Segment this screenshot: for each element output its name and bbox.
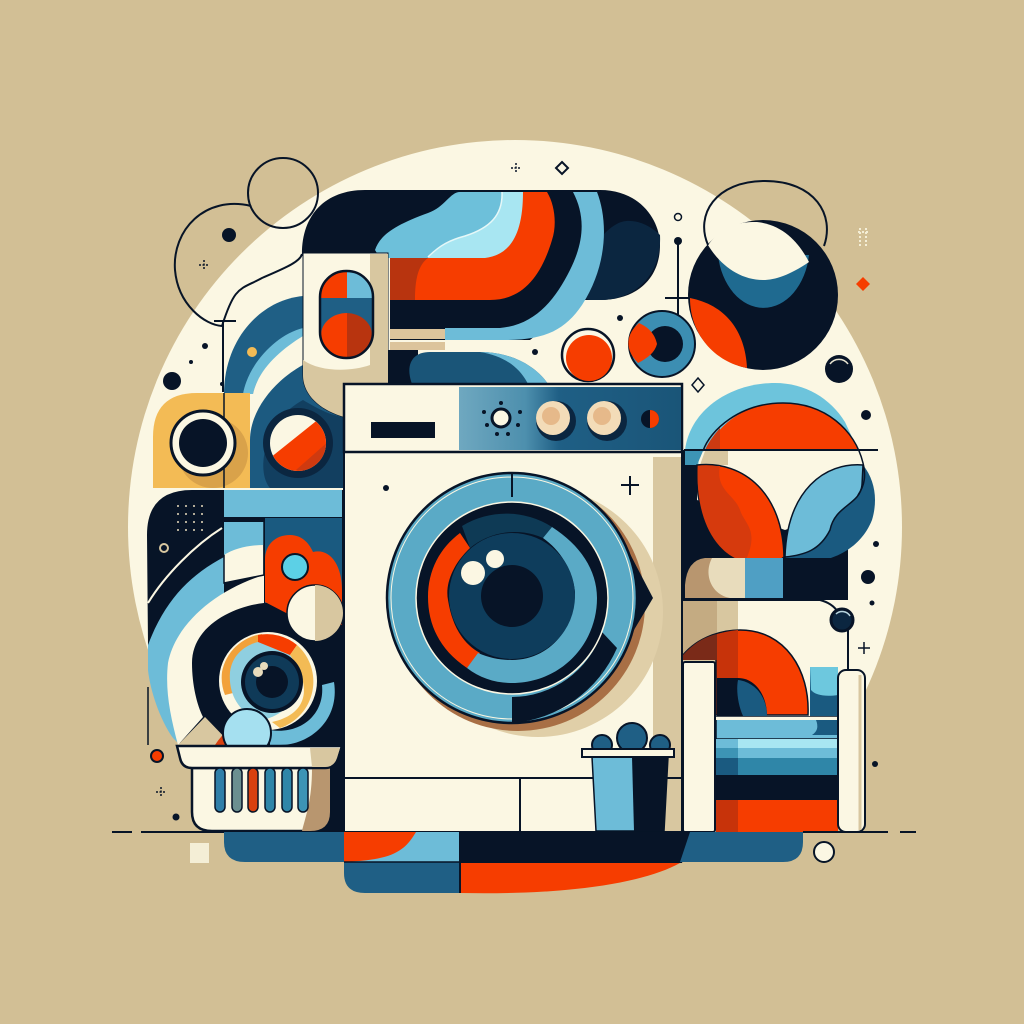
door bbox=[387, 473, 637, 723]
plus mark bbox=[621, 476, 639, 495]
machine body bbox=[344, 450, 682, 832]
dot mark bbox=[383, 485, 389, 491]
left stacked shapes bbox=[147, 490, 343, 832]
bucket bbox=[582, 723, 674, 831]
control panel bbox=[344, 384, 682, 452]
left blue arch bbox=[224, 296, 303, 394]
base dividers bbox=[345, 778, 681, 831]
right blue leaf bbox=[785, 465, 863, 557]
left orange leaf bbox=[697, 465, 784, 563]
small lens bbox=[219, 632, 335, 745]
ring ball bbox=[628, 311, 695, 377]
floor line bbox=[112, 831, 916, 833]
top wave panel bbox=[302, 190, 660, 350]
scattered dots bbox=[163, 228, 879, 820]
side shade bbox=[653, 457, 681, 831]
dotted texture bbox=[177, 505, 203, 531]
right circle with leaves bbox=[683, 383, 878, 600]
small orange ball bbox=[562, 329, 614, 381]
large navy circle top right bbox=[688, 181, 838, 370]
washing machine bbox=[344, 384, 682, 832]
pill icon bbox=[320, 271, 373, 358]
thin line outlines bbox=[175, 158, 694, 392]
teal arch with chip ball bbox=[250, 365, 343, 488]
door shadow bbox=[413, 487, 663, 737]
cushion and armchair bbox=[683, 558, 865, 832]
detergent bottle card bbox=[303, 253, 388, 417]
laundry basket bbox=[177, 709, 342, 831]
background cream circle bbox=[128, 140, 902, 832]
mid wave behind machine bbox=[388, 350, 548, 386]
illustration: abstract washing machine bbox=[112, 140, 916, 894]
right teal lobe bbox=[785, 465, 875, 563]
yellow panel bbox=[153, 393, 250, 488]
bottom blocks bbox=[224, 832, 803, 893]
small accents bbox=[151, 162, 870, 863]
cream circle on left bbox=[287, 585, 343, 641]
